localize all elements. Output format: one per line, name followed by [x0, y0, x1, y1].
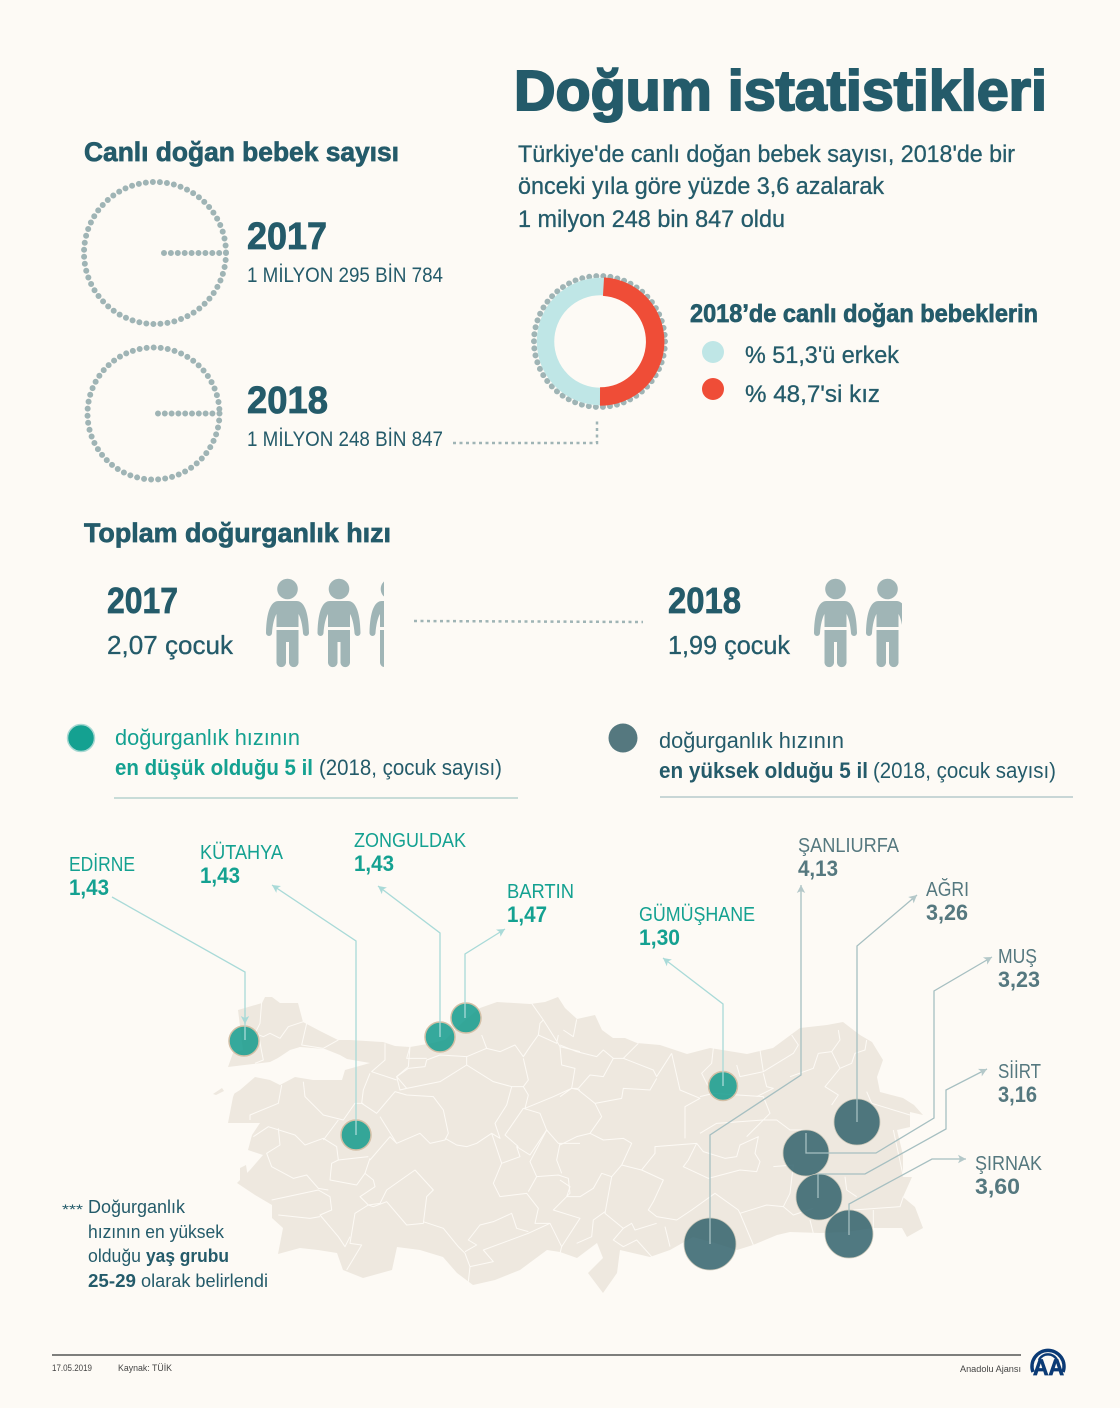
heading: live births: Canlı doğan bebek sayısı	[84, 137, 399, 167]
map of Turkey	[213, 997, 923, 1293]
label: Kütahya	[200, 842, 284, 888]
legend: boys: % 51,3'ü erkek	[745, 342, 900, 369]
label: Siirt	[998, 1060, 1041, 1107]
label: Ağrı	[926, 878, 969, 925]
fertility 2017: 2017	[107, 580, 178, 621]
footnote: olduğu	[88, 1246, 141, 1266]
fertility 2018: 1,99 çocuk	[668, 630, 791, 660]
connector: 2018 count to donut	[453, 421, 597, 443]
legend: lowest five provinces	[68, 724, 518, 798]
label: Edirne	[69, 853, 135, 900]
intro text	[518, 141, 1015, 233]
panel: fertility rate	[84, 518, 909, 667]
leader lines: highest provinces	[710, 885, 992, 1244]
label: Zonguldak	[354, 830, 467, 876]
label: Zonguldak: 1,43	[354, 851, 394, 876]
footer: Anadolu Ajansı	[960, 1364, 1021, 1374]
legend: girls: % 48,7'si kız	[745, 381, 880, 408]
leader lines: lowest provinces	[112, 885, 723, 1135]
label: Gümüşhane: GÜMÜŞHANE	[639, 904, 755, 926]
label: Şırnak	[975, 1153, 1043, 1199]
footnote	[62, 1197, 268, 1291]
label: Şırnak: 3,60	[975, 1174, 1020, 1199]
dotted divider between years	[414, 621, 643, 622]
label: Siirt: SİİRT	[998, 1060, 1041, 1083]
Marmara and Aegean water	[232, 1047, 370, 1095]
label: Edirne: EDİRNE	[69, 853, 135, 876]
heading: fertility rate: Toplam doğurganlık hızı	[84, 518, 391, 548]
intro text: önceki yıla göre yüzde 3,6 azalarak	[518, 173, 885, 200]
footnote: olarak belirlendi	[141, 1271, 268, 1291]
map markers: highest provinces	[684, 1099, 880, 1270]
label: Siirt: 3,16	[998, 1082, 1037, 1107]
title: Doğum istatistikleri	[514, 59, 1047, 123]
year and count 2017	[247, 216, 443, 287]
label: Kütahya: KÜTAHYA	[200, 842, 284, 864]
fertility 2018	[668, 580, 791, 660]
footnote: yaş grubu	[146, 1246, 229, 1266]
fertility 2017	[107, 580, 234, 660]
icon: people 2017	[266, 578, 384, 668]
panel: live births	[84, 137, 443, 480]
icon: Anadolu Agency logo: AA	[1033, 1355, 1064, 1380]
legend: highest five provinces: doğurganlık hızının	[659, 728, 844, 753]
label: Bartın: BARTIN	[507, 881, 574, 903]
year and count 2018	[247, 380, 443, 451]
label: Ağrı: AĞRI	[926, 878, 969, 901]
label: Ağrı: 3,26	[926, 900, 968, 925]
legend: lowest five provinces: doğurganlık hızının	[115, 725, 300, 750]
legend: highest five provinces	[608, 724, 1073, 797]
label: Şanlıurfa	[798, 835, 900, 881]
heading: gender: 2018’de canlı doğan bebeklerin	[690, 300, 1038, 328]
footer	[52, 1355, 1021, 1374]
year and count 2017: 2017	[247, 216, 327, 258]
intro text: 1 milyon 248 bin 847 oldu	[518, 206, 785, 233]
label: Edirne: 1,43	[69, 875, 109, 900]
intro text: Türkiye'de canlı doğan bebek sayısı, 2018'de bir	[518, 141, 1015, 168]
label: Zonguldak: ZONGULDAK	[354, 830, 467, 852]
label: Şanlıurfa: ŞANLIURFA	[798, 835, 900, 857]
icon: people 2018	[814, 579, 909, 667]
panel: gender legend	[690, 300, 1038, 408]
label: Şırnak: ŞIRNAK	[975, 1153, 1043, 1175]
footnote: hızının en yüksek	[88, 1222, 225, 1242]
footnote: ***	[62, 1201, 84, 1217]
year and count 2018: 1 MİLYON 248 BİN 847	[247, 428, 443, 451]
label: Bartın	[507, 881, 574, 927]
fertility 2017: 2,07 çocuk	[107, 630, 234, 660]
label: Muş: 3,23	[998, 967, 1040, 992]
year and count 2017: 1 MİLYON 295 BİN 784	[247, 264, 443, 287]
legend: lowest five provinces: (2018, çocuk sayısı)	[319, 755, 502, 780]
legend: highest five provinces: en yüksek olduğu 5 il	[659, 758, 868, 783]
map markers: lowest provinces	[229, 1003, 738, 1150]
donut chart: gender split	[534, 276, 665, 407]
fertility 2018: 2018	[668, 580, 741, 621]
dotted circle 2017	[84, 182, 226, 324]
label: Şanlıurfa: 4,13	[798, 856, 838, 881]
year and count 2018: 2018	[247, 380, 328, 422]
label: Muş: MUŞ	[998, 946, 1037, 968]
province borders	[250, 1002, 580, 1282]
label: Gümüşhane: 1,30	[639, 925, 680, 950]
dotted circle 2018	[88, 348, 220, 480]
label: Kütahya: 1,43	[200, 863, 240, 888]
label: Gümüşhane	[639, 904, 755, 950]
legend: lowest five provinces: en düşük olduğu 5 il	[115, 755, 313, 780]
label: Bartın: 1,47	[507, 902, 547, 927]
legend: highest five provinces: (2018, çocuk sayısı)	[873, 758, 1056, 783]
label: Muş	[998, 946, 1040, 992]
footnote: 25-29	[88, 1271, 136, 1291]
legend: girls	[702, 378, 880, 408]
footer: Kaynak: TÜİK	[118, 1363, 172, 1373]
footnote: Doğurganlık	[88, 1197, 186, 1217]
footer: 17.05.2019	[52, 1363, 92, 1373]
